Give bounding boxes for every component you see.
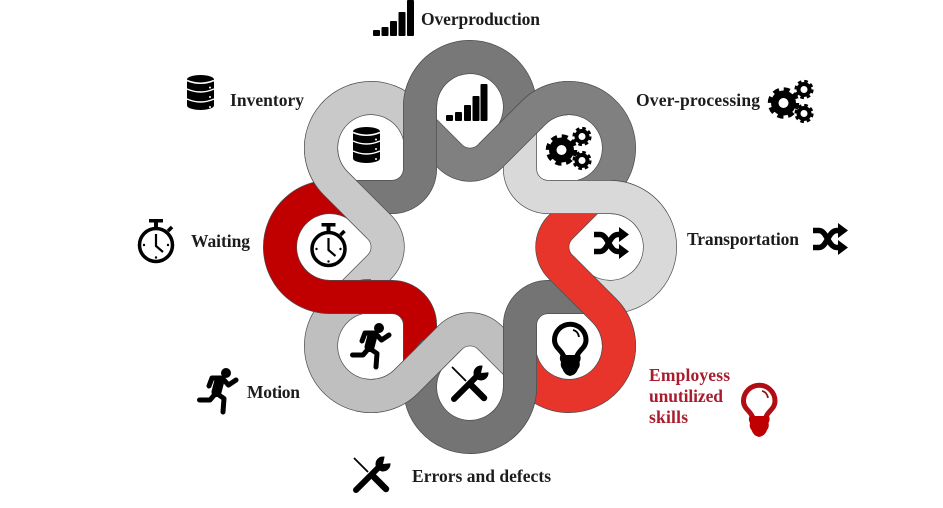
- icon: runner outside: [200, 368, 236, 412]
- ribbon: motion: [300, 247, 519, 466]
- label: Inventory: Inventory: [230, 90, 304, 110]
- ribbon: over-processing: [421, 28, 640, 247]
- label: Over-processing: Over-processing: [636, 90, 760, 110]
- label: Transportation: Transportation: [687, 229, 799, 249]
- icon: stopwatch outside: [140, 219, 172, 262]
- icon: gears outside: [770, 82, 812, 122]
- icon: database outside: [187, 75, 214, 110]
- icon: database in wheel: [353, 127, 380, 163]
- icon: shuffle arrows in wheel: [594, 227, 629, 259]
- icon: tools in wheel: [452, 364, 491, 399]
- woven top segments of the ribbons: [287, 64, 653, 430]
- icon: light bulb outside in red: [744, 385, 775, 437]
- label: Employess unutilized skills: Employess: [649, 365, 730, 385]
- icon: runner in wheel: [352, 323, 389, 367]
- label: Errors and defects: Errors and defects: [412, 466, 551, 486]
- icon: bars in wheel: [446, 84, 488, 121]
- label: Overproduction: Overproduction: [421, 9, 540, 29]
- label: Waiting: Waiting: [191, 231, 250, 251]
- label: Employess unutilized skills: [649, 365, 730, 427]
- ribbon: employees unutilized skills: [470, 198, 689, 417]
- icon: bars outside: [373, 0, 414, 36]
- icon: shuffle arrows outside: [813, 223, 848, 255]
- ribbon: transportation: [520, 127, 660, 297]
- label: Employess unutilized skills: skills: [649, 407, 688, 427]
- label: Motion: Motion: [247, 382, 300, 402]
- wheel of eight interlaced ribbons: [251, 28, 689, 466]
- ribbon: overproduction: [350, 57, 520, 197]
- ribbon: errors and defects: [420, 297, 590, 437]
- icon: light bulb in wheel: [554, 324, 586, 376]
- label: Employess unutilized skills: unutilized: [649, 386, 723, 406]
- icon: stopwatch in wheel: [312, 223, 345, 266]
- icon: gears in wheel: [548, 128, 590, 168]
- icon: tools outside: [354, 455, 393, 490]
- ribbon: waiting: [280, 197, 420, 367]
- ribbon: inventory: [251, 77, 470, 296]
